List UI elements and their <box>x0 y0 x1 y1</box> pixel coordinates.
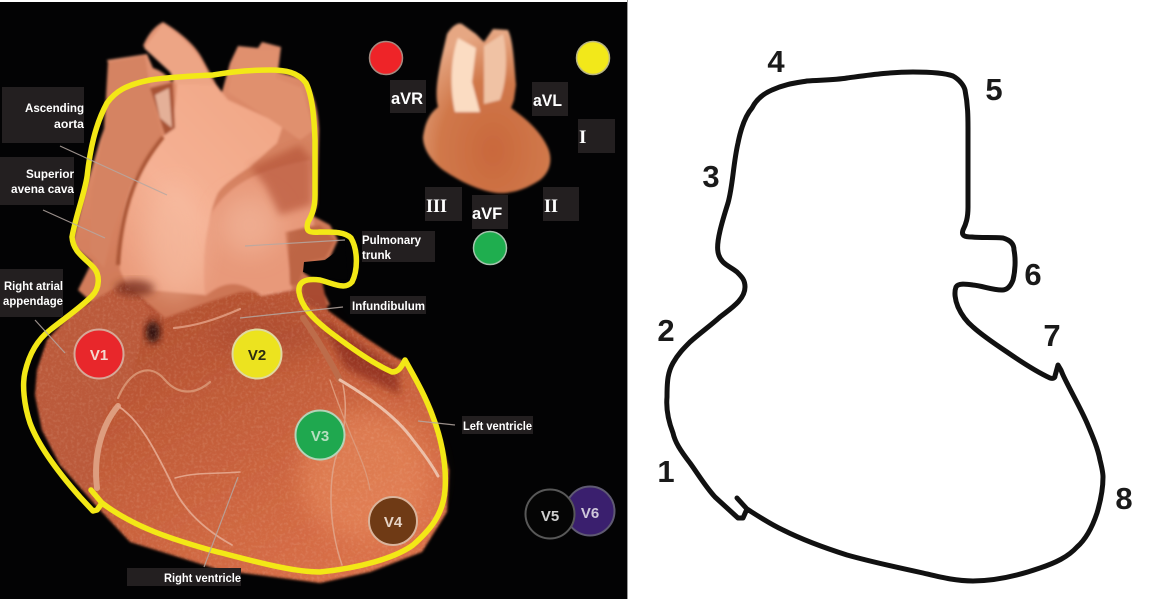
electrode: V1: V1 <box>90 347 108 364</box>
illustration: large anatomical heart <box>20 22 460 590</box>
label: right atrial appendage: appendage <box>3 294 63 308</box>
label: pulmonary trunk <box>245 231 435 262</box>
label: infundibulum <box>240 296 426 318</box>
electrode: V2: V2 <box>248 347 266 364</box>
black gap inside pulmonary loop <box>303 245 348 280</box>
electrode: V6 <box>566 486 614 536</box>
label: ascending aorta: aorta <box>54 117 84 131</box>
number 6: 6 <box>1024 257 1042 292</box>
label: right ventricle <box>127 477 241 586</box>
number 7: 7 <box>1043 318 1061 353</box>
label: aVF: aVF <box>472 205 502 223</box>
label: right ventricle: Right ventricle <box>164 571 241 585</box>
lead dot: aVF green <box>474 232 506 264</box>
label: I: I <box>579 127 586 148</box>
label: aVF <box>472 195 508 229</box>
label: pulmonary trunk: trunk <box>362 248 391 262</box>
coronary vessels <box>96 309 438 565</box>
label: aVR: aVR <box>391 90 423 108</box>
number 8: 8 <box>1115 481 1133 516</box>
outline: yellow heart silhouette <box>24 70 445 572</box>
number 3: 3 <box>702 159 720 194</box>
label: pulmonary trunk: Pulmonary <box>362 233 421 247</box>
electrode: V3 <box>296 410 344 460</box>
number 4: 4 <box>767 44 785 79</box>
number 2: 2 <box>657 313 675 348</box>
electrode: V1 <box>74 330 124 378</box>
label: ascending aorta: Ascending <box>25 101 84 115</box>
label: aVR <box>390 80 426 113</box>
number 1: 1 <box>657 454 675 489</box>
label: right atrial appendage: Right atrial <box>4 279 63 293</box>
label: left ventricle <box>418 416 533 434</box>
label: superior vena cava: avena cava <box>11 182 74 196</box>
label: superior vena cava: Superior <box>26 167 74 181</box>
electrode: V6: V6 <box>581 505 599 522</box>
lead dot: aVR red <box>370 42 402 74</box>
panel: heart photograph with ECG leads <box>0 0 628 599</box>
electrode: V3: V3 <box>311 428 329 445</box>
label: III: III <box>426 196 447 217</box>
soft shading <box>115 137 430 540</box>
electrode: V2 <box>232 330 282 378</box>
label: aVL: aVL <box>533 92 562 110</box>
panel: numbered outline diagram <box>657 44 1133 581</box>
illustration: small heart reference <box>423 23 550 193</box>
label: II: II <box>544 196 558 217</box>
lead dot: aVL yellow <box>576 42 610 74</box>
label: III <box>425 187 462 221</box>
label: I <box>578 119 615 153</box>
electrode: V5: V5 <box>541 508 559 525</box>
label: II <box>543 187 579 221</box>
label: superior vena cava <box>0 157 105 238</box>
electrode: V5 <box>526 490 574 538</box>
label: aVL <box>532 82 568 116</box>
electrode: V4: V4 <box>384 514 403 531</box>
electrode: V4 <box>369 497 417 545</box>
outline: black heart silhouette <box>667 72 1103 581</box>
surface texture <box>20 280 460 590</box>
label: ascending aorta <box>2 87 167 195</box>
label: left ventricle: Left ventricle <box>463 419 532 433</box>
label: right atrial appendage <box>0 269 65 353</box>
number 5: 5 <box>985 72 1003 107</box>
label: infundibulum: Infundibulum <box>352 299 425 313</box>
